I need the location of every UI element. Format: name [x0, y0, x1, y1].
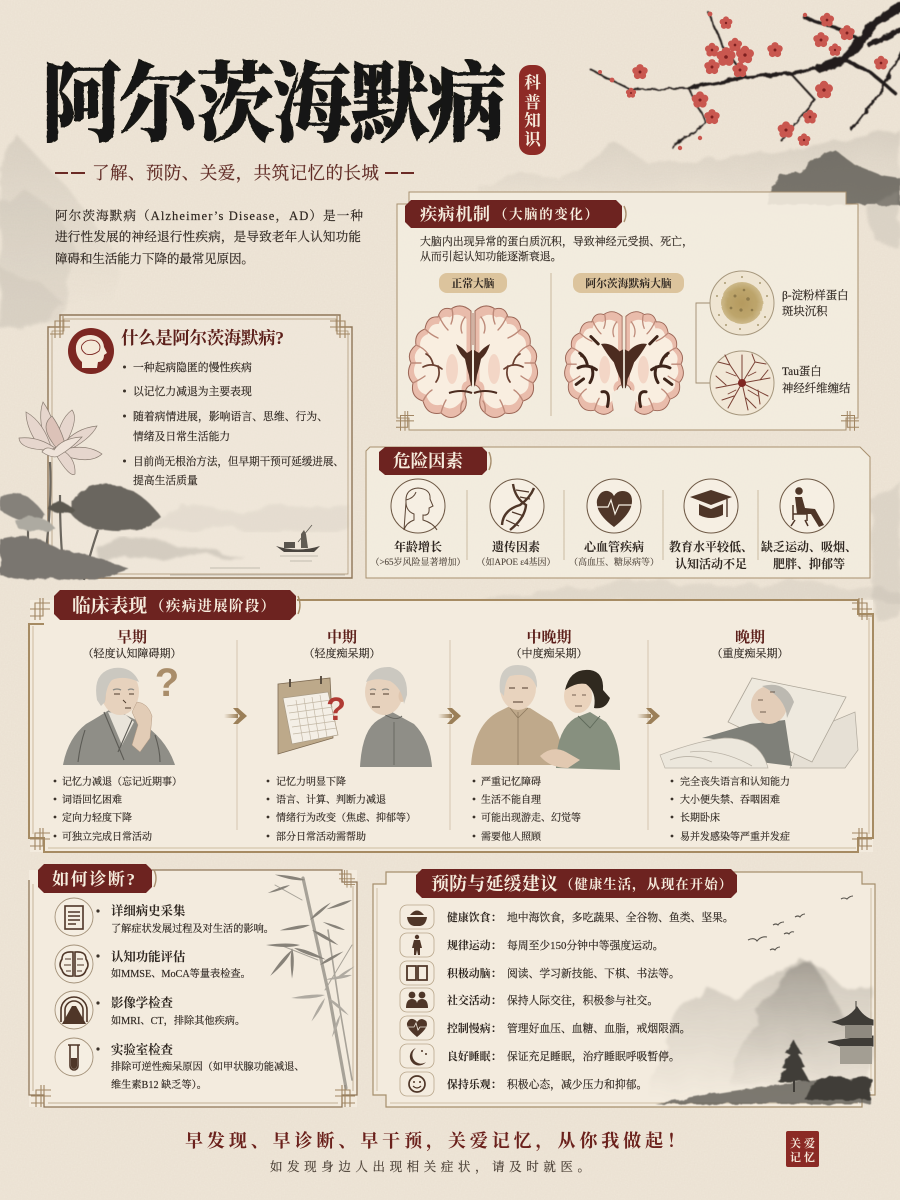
bullet list: 以记忆力减退为主要表现	[133, 384, 252, 398]
arrow	[438, 708, 461, 724]
header ribbon: （疾病进展阶段）	[150, 597, 275, 615]
arrow	[224, 708, 247, 724]
intro paragraph	[55, 209, 363, 266]
stage: late: （重度痴呆期）	[712, 646, 788, 660]
item: chronic disease	[400, 1016, 691, 1040]
item: exercise	[400, 933, 664, 957]
birds	[748, 896, 853, 950]
bamboo	[266, 873, 355, 1088]
item: brain exercise: 积极动脑：	[447, 966, 501, 980]
stage: early: （轻度认知障碍期）	[82, 646, 182, 660]
panel: risk factors	[366, 447, 870, 578]
item: imaging: 如MRI、CT，排除其他疾病。	[111, 1014, 245, 1027]
seal: 科普知识: 普	[524, 93, 541, 112]
symptoms: 记忆力明显下降	[276, 775, 346, 788]
risk: education: 认知活动不足	[675, 556, 747, 571]
risk: inactivity: 肥胖、抑郁等	[773, 556, 845, 571]
plaque and tangle labels: 斑块沉积	[782, 304, 828, 318]
illustration: calendar and man: ?	[326, 691, 346, 727]
panel: what is Alzheimer's	[0, 315, 352, 580]
item: sleep: 保证充足睡眠，治疗睡眠呼吸暂停。	[507, 1049, 680, 1063]
symptoms: 易并发感染等严重并发症	[680, 830, 790, 843]
symptoms: 情绪行为改变（焦虑、抑郁等）	[276, 811, 416, 824]
bullet list: 提高生活质量	[133, 473, 198, 487]
panel: prevention	[373, 869, 875, 1107]
item: cognitive: 认知功能评估	[111, 949, 186, 964]
illustration: calendar and man	[278, 667, 432, 767]
symptoms	[54, 775, 182, 843]
connector lines	[696, 303, 710, 383]
header ribbon	[416, 869, 737, 898]
symptoms	[671, 775, 790, 843]
item: exercise: 每周至少150分钟中等强度运动。	[507, 938, 664, 952]
stage: middle-late: （中度痴呆期）	[510, 646, 588, 660]
symptoms: 严重记忆障碍	[481, 775, 541, 788]
description	[420, 234, 693, 263]
item: lab: 维生素B12 缺乏等）。	[111, 1078, 207, 1091]
item: imaging	[55, 991, 245, 1029]
symptoms: 完全丧失语言和认知能力	[680, 775, 790, 788]
stage: late: 晚期	[735, 628, 765, 646]
seal: 科普知识: 识	[524, 130, 542, 149]
symptoms	[473, 775, 581, 843]
item: lab	[55, 1038, 305, 1091]
symptoms: 长期卧床	[680, 811, 720, 824]
item: cognitive: 如MMSE、MoCA等量表检查。	[111, 967, 251, 980]
ink wash mountains background	[0, 130, 900, 620]
illustration: patient and carer	[471, 665, 620, 770]
footer seal: 关爱	[790, 1136, 815, 1150]
risk: age	[370, 479, 466, 567]
panel: diagnosis	[29, 864, 357, 1107]
symptoms: 语言、计算、判断力减退	[276, 793, 386, 806]
symptoms: 可能出现游走、幻觉等	[481, 811, 581, 824]
header ribbon: （健康生活，从现在开始）	[560, 876, 732, 893]
header ribbon: 疾病机制	[420, 204, 490, 224]
risk: cardiovascular: 心血管疾病	[584, 539, 644, 554]
symptoms: 可独立完成日常活动	[62, 830, 152, 843]
risk: inactivity	[761, 479, 857, 571]
seal: 科普知识: 科	[524, 73, 541, 92]
title: 阿尔茨海默病	[42, 34, 506, 159]
header ribbon: 如何诊断?	[52, 869, 135, 889]
footer slogan: 早发现、早诊断、早干预，关爱记忆，从你我做起！	[185, 1130, 685, 1152]
item: exercise: 规律运动：	[447, 938, 501, 952]
intro paragraph: 阿尔茨海默病（Alzheimer’s Disease，AD）是一种	[55, 209, 363, 224]
item: lab: 实验室检查	[111, 1042, 174, 1057]
heading: what is: 什么是阿尔茨海默病?	[121, 328, 284, 348]
seal: 科普知识	[519, 65, 546, 155]
label: normal brain	[439, 273, 507, 293]
stage: early: 早期	[117, 629, 147, 646]
brain: normal	[408, 306, 538, 418]
footer slogan	[185, 1130, 685, 1174]
plaque and tangle labels: 神经纤维缠结	[782, 381, 851, 395]
arrow	[637, 708, 660, 724]
header ribbon: 危险因素	[393, 451, 463, 471]
item: sleep	[400, 1044, 680, 1068]
bullet list: 目前尚无根治方法，但早期干预可延缓进展、	[133, 455, 344, 468]
seal: 科普知识: 知	[524, 111, 541, 130]
illustration: patient in bed	[660, 678, 858, 768]
brain: Alzheimer's	[565, 312, 683, 418]
subtitle: 了解、预防、关爱，共筑记忆的长城	[92, 163, 379, 183]
header ribbon	[405, 200, 626, 228]
item: social: 保持人际交往，积极参与社交。	[507, 993, 658, 1007]
bullet list: 随着病情进展，影响语言、思维、行为、	[133, 409, 328, 423]
intro paragraph: 进行性发展的神经退行性疾病，是导致老年人认知功能	[55, 229, 361, 245]
bullet list: 一种起病隐匿的慢性疾病	[133, 360, 252, 374]
symptoms: 需要他人照顾	[481, 830, 542, 843]
item: imaging: 影像学检查	[111, 995, 174, 1010]
label: AD brain	[573, 273, 684, 293]
item: chronic disease: 管理好血压、血糖、血脂，戒烟限酒。	[507, 1021, 691, 1035]
panel: clinical stages	[29, 590, 873, 852]
stage: middle: （轻度痴呆期）	[304, 646, 380, 660]
risk: genetics: （如APOE ε4基因）	[476, 556, 556, 567]
item: diet: 健康饮食：	[447, 910, 501, 924]
icon: brain head	[68, 328, 114, 374]
header ribbon	[54, 590, 300, 620]
beta amyloid plaque	[710, 271, 774, 335]
risk: inactivity: 缺乏运动、吸烟、	[761, 539, 857, 554]
risk: education	[669, 479, 753, 571]
item: optimism	[400, 1072, 647, 1096]
plaque and tangle labels: β-淀粉样蛋白	[782, 288, 849, 302]
item: social	[400, 988, 658, 1012]
stage: late	[660, 628, 858, 843]
intro paragraph: 障碍和生活能力下降的最常见原因。	[55, 251, 254, 266]
symptoms: 大小便失禁、吞咽困难	[680, 793, 780, 806]
symptoms: 生活不能自理	[481, 793, 541, 806]
risk: cardiovascular	[569, 479, 659, 567]
stage: middle: 中期	[327, 629, 357, 646]
stage: middle-late: 中晚期	[526, 628, 572, 646]
illustration: thinking man	[63, 661, 179, 765]
footer slogan: 如发现身边人出现相关症状，请及时就医。	[270, 1159, 590, 1174]
item: diet: 地中海饮食，多吃蔬果、全谷物、鱼类、坚果。	[507, 910, 734, 924]
risk: genetics	[476, 479, 556, 567]
risk: age: 年龄增长	[394, 539, 442, 554]
item: brain exercise: 阅读、学习新技能、下棋、书法等。	[507, 966, 680, 980]
plaque and tangle labels	[782, 288, 851, 395]
item: diet	[400, 905, 734, 929]
footer seal	[786, 1131, 819, 1167]
stage: early	[54, 629, 182, 843]
risk: cardiovascular: （高血压、糖尿病等）	[569, 556, 659, 567]
item: history	[55, 898, 274, 936]
header ribbon: 临床表现	[72, 595, 147, 617]
symptoms: 部分日常活动需帮助	[276, 830, 366, 843]
symptoms	[267, 775, 416, 843]
label: normal brain: 正常大脑	[451, 276, 495, 290]
symptoms: 词语回忆困难	[62, 793, 122, 806]
item: optimism: 积极心态，减少压力和抑郁。	[507, 1077, 647, 1091]
stage: middle-late	[471, 628, 620, 843]
lake with boat	[95, 505, 350, 575]
illustration: thinking man: ?	[155, 661, 179, 705]
description: 大脑内出现异常的蛋白质沉积，导致神经元受损、死亡，	[420, 234, 693, 248]
risk: genetics: 遗传因素	[492, 539, 540, 554]
item: lab: 排除可逆性痴呆原因（如甲状腺功能减退、	[111, 1060, 305, 1073]
bullet list	[123, 360, 344, 487]
header ribbon	[38, 864, 156, 893]
symptoms: 记忆力减退（忘记近期事）	[62, 775, 182, 788]
panel: disease mechanism	[396, 192, 859, 431]
header ribbon: 预防与延缓建议	[431, 874, 558, 894]
risk: age: （>65岁风险显著增加）	[370, 556, 466, 567]
item: optimism: 保持乐观：	[447, 1077, 501, 1091]
footer seal: 记忆	[790, 1150, 815, 1164]
plaque and tangle labels: Tau蛋白	[782, 365, 822, 378]
pine hill	[768, 150, 900, 205]
description: 从而引起认知功能逐渐衰退。	[420, 249, 562, 263]
header ribbon	[379, 447, 491, 475]
label: AD brain: 阿尔茨海默病大脑	[585, 276, 672, 290]
lotus illustration	[0, 402, 161, 580]
stage: middle	[267, 629, 432, 843]
item: social: 社交活动：	[447, 993, 501, 1007]
item: cognitive	[55, 945, 251, 983]
risk: education: 教育水平较低、	[669, 539, 753, 554]
item: sleep: 良好睡眠：	[447, 1049, 501, 1063]
symptoms: 定向力轻度下降	[62, 811, 132, 824]
item: history: 了解症状发展过程及对生活的影响。	[111, 922, 274, 935]
item: chronic disease: 控制慢病：	[447, 1021, 501, 1035]
tau tangle	[710, 351, 774, 415]
bullet list: 情绪及日常生活能力	[133, 429, 230, 443]
header ribbon: （大脑的变化）	[494, 206, 598, 222]
item: brain exercise	[400, 961, 680, 985]
item: history: 详细病史采集	[111, 903, 186, 918]
landscape illustration	[650, 957, 873, 1104]
plum blossom branch	[591, 4, 900, 150]
